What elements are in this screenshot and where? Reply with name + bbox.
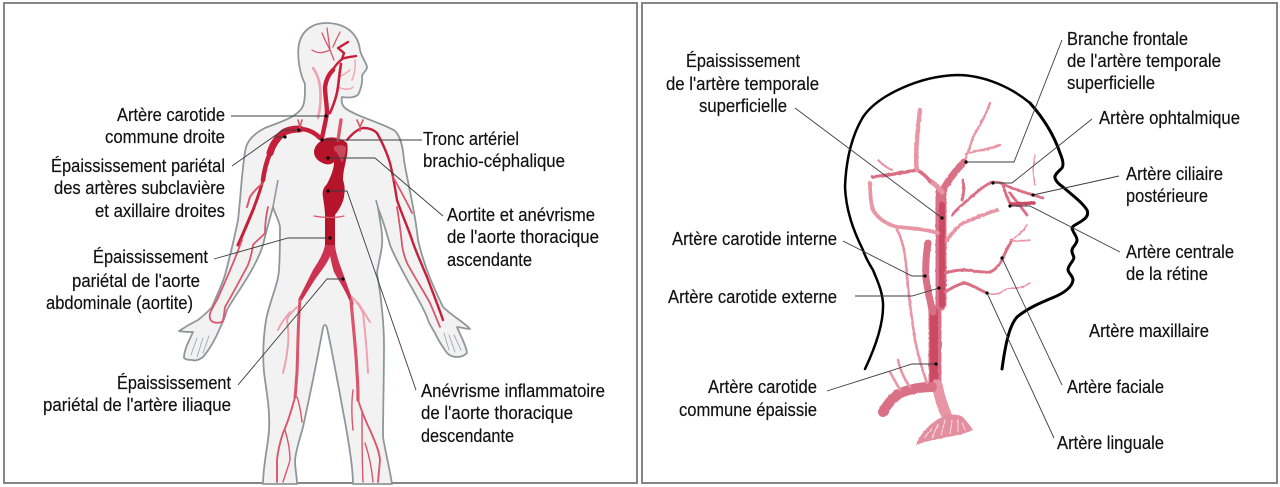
- label: épaississement pariétal subclavière: des artères subclavière: [54, 177, 225, 198]
- label: branche frontale: de l'artère temporale: [1067, 50, 1221, 71]
- facial and lingual branches: [945, 225, 1030, 294]
- panel: whole-body arterial system: [4, 3, 637, 484]
- leader: linguale: [985, 291, 1054, 438]
- label: épaississement temporale superficielle: de l'artère temporale: [666, 73, 819, 94]
- leader: carotide externe: [855, 286, 941, 296]
- label: artère ciliaire postérieure: [1126, 163, 1223, 206]
- label: tronc artériel brachio-céphalique: [423, 128, 565, 171]
- label: épaississement pariétal subclavière: [51, 155, 225, 221]
- illustration: human body silhouette: [179, 23, 470, 484]
- label: artère carotide interne: Artère carotide interne: [672, 228, 837, 249]
- label: épaississement aorte abdominale: [46, 246, 208, 313]
- temporal and frontal branches: [873, 103, 1000, 192]
- label: artère maxillaire: Artère maxillaire: [1089, 320, 1209, 341]
- label: anévrisme inflammatoire: de l'aorte thoracique: [421, 402, 573, 423]
- aneurysmal aorta and arch: [314, 120, 348, 250]
- illustration: body arteries: [210, 28, 443, 482]
- label: artère carotide commune droite: [105, 104, 225, 147]
- label: épaississement pariétal subclavière: et axillaire droites: [95, 200, 225, 221]
- label: branche frontale: [1067, 28, 1221, 93]
- label: anévrisme inflammatoire: Anévrisme inflammatoire: [421, 380, 605, 401]
- label: tronc artériel brachio-céphalique: Tronc artériel: [423, 128, 519, 149]
- leader: carotide commune: [827, 362, 938, 391]
- label: épaississement pariétal subclavière: Épaississement pariétal: [51, 155, 225, 176]
- label: artère carotide commune épaissie: [679, 376, 817, 420]
- leader: aorte abdominale: [214, 236, 332, 259]
- label: artère ciliaire postérieure: postérieure: [1126, 185, 1208, 206]
- label: artère carotide commune droite: commune droite: [105, 126, 225, 147]
- label: anévrisme inflammatoire: [421, 380, 605, 446]
- label: épaississement temporale superficielle: Épaississement: [686, 50, 800, 71]
- label: artère centrale de la rétine: de la rétine: [1126, 263, 1208, 284]
- label: épaississement temporale superficielle: [666, 50, 819, 116]
- subclavian and axillary arteries, image left arm: [210, 120, 320, 323]
- label: branche frontale: superficielle: [1067, 72, 1155, 93]
- leader: carotide interne: [843, 241, 927, 278]
- leader: branche frontale: [964, 40, 1062, 164]
- leader: tronc artériel: [320, 138, 422, 142]
- label: artère carotide commune épaissie: Artère carotide: [708, 376, 817, 397]
- ophthalmic branches: [952, 155, 1043, 215]
- label: épaississement aorte abdominale: pariétal de l'aorte: [72, 270, 200, 291]
- label: tronc artériel brachio-céphalique: brachio-céphalique: [423, 150, 565, 171]
- label: épaississement artère iliaque: pariétal de l'artère iliaque: [43, 394, 231, 415]
- label: artère ciliaire postérieure: Artère ciliaire: [1126, 163, 1223, 184]
- label: artère carotide commune droite: Artère carotide: [117, 104, 225, 125]
- label: épaississement artère iliaque: [43, 372, 231, 415]
- label: branche frontale: Branche frontale: [1067, 28, 1188, 49]
- leader: aortite: [326, 156, 443, 216]
- illustration: head profile outline: [845, 75, 1088, 369]
- leader: anévrisme inflammatoire: [326, 189, 416, 390]
- label: artère centrale de la rétine: [1126, 241, 1234, 284]
- label: épaississement temporale superficielle: superficielle: [699, 95, 787, 116]
- leader: ophtalmique: [991, 119, 1092, 185]
- label: aortite et anévrisme: [447, 204, 599, 270]
- leader: centrale de la rétine: [1008, 204, 1120, 252]
- label: artère faciale: Artère faciale: [1067, 376, 1164, 397]
- leader: ciliaire: [1031, 176, 1119, 197]
- label: artère carotide externe: Artère carotide externe: [668, 286, 837, 307]
- label: artère centrale de la rétine: Artère centrale: [1126, 241, 1234, 262]
- label: épaississement artère iliaque: Épaississement: [117, 372, 231, 393]
- label: anévrisme inflammatoire: descendante: [421, 425, 514, 446]
- leader: artère carotide commune droite: [231, 114, 328, 118]
- faint head and neck vessels: [312, 28, 355, 118]
- carotid arteries: [322, 42, 356, 138]
- label: aortite et anévrisme: ascendante: [447, 249, 532, 270]
- leader: subclavière et axillaire: [232, 128, 301, 166]
- label: artère ophtalmique: Artère ophtalmique: [1099, 107, 1240, 128]
- occipital and posterior branches: [870, 183, 997, 383]
- label: artère linguale: Artère linguale: [1057, 432, 1164, 453]
- label: aortite et anévrisme: de l'aorte thoracique: [447, 226, 599, 247]
- iliac and leg arteries: [277, 245, 380, 482]
- leader: artère iliaque: [238, 277, 345, 385]
- panel: head and neck arteries: [642, 3, 1277, 483]
- label: épaississement aorte abdominale: Épaississement: [93, 246, 208, 267]
- label: artère carotide commune épaissie: commune épaissie: [679, 399, 817, 420]
- leader: faciale: [1000, 256, 1062, 385]
- carotid trunk: [883, 192, 973, 445]
- arteries of the image right arm: [347, 120, 443, 327]
- label: épaississement aorte abdominale: abdominale (aortite): [46, 292, 193, 313]
- leader: temporale superficielle: [795, 108, 944, 220]
- illustration: carotid arterial tree: [870, 103, 1043, 445]
- label: aortite et anévrisme: Aortite et anévrisme: [447, 204, 595, 225]
